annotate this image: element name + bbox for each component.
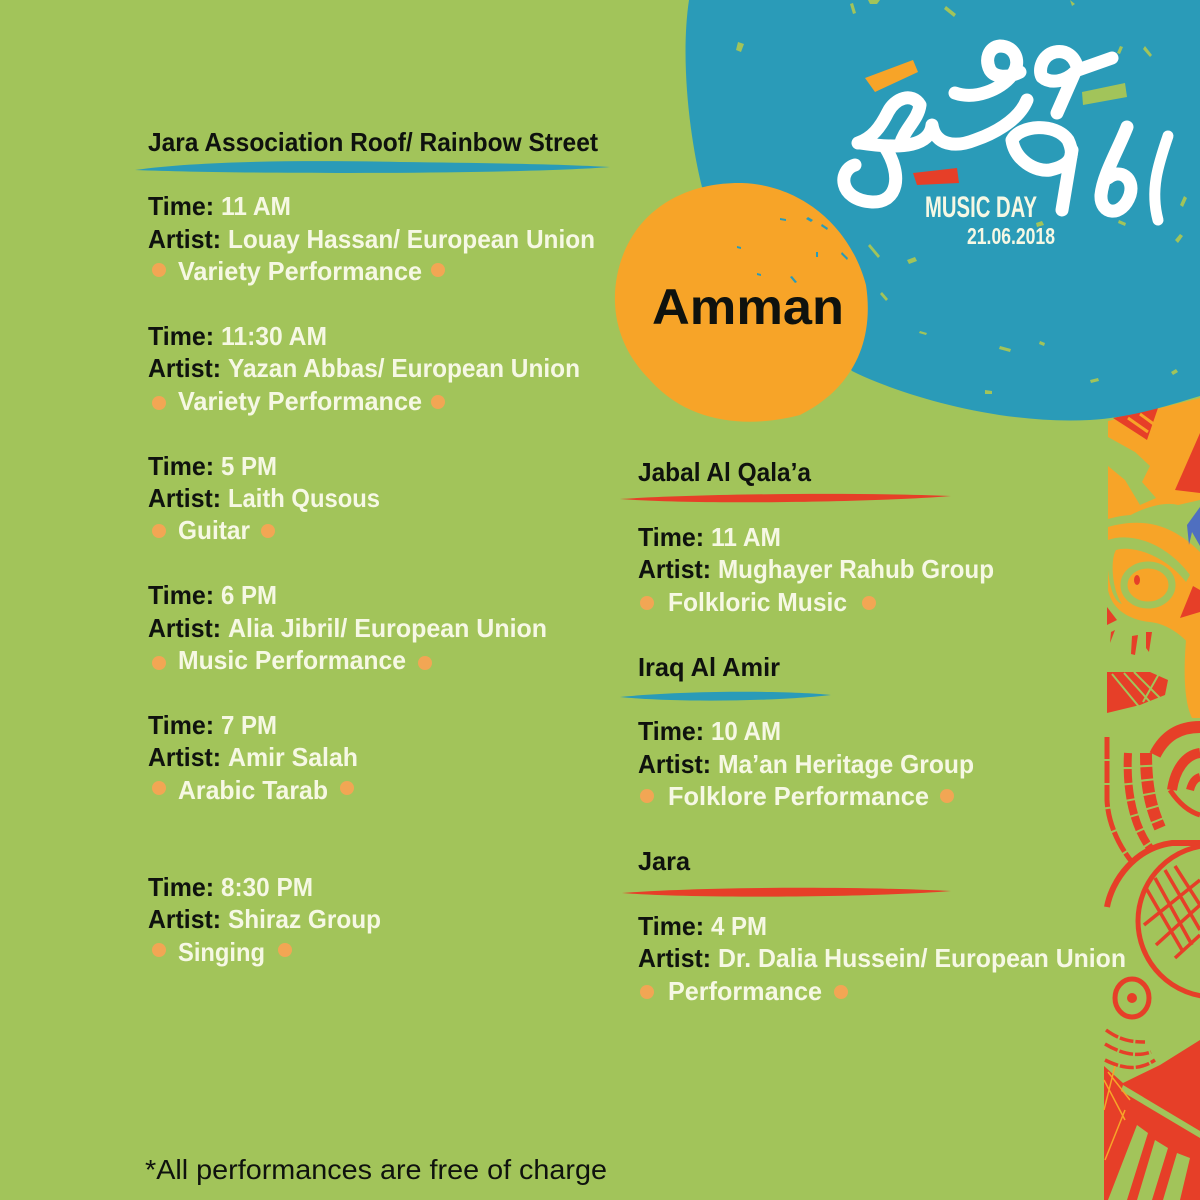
performance 4: Time: xyxy=(148,580,214,610)
performance 5: Amir Salah xyxy=(228,742,358,772)
performance 6: Singing xyxy=(178,937,265,967)
performance 2: Artist: xyxy=(148,353,221,383)
green stroke xyxy=(1082,83,1127,105)
orange stroke xyxy=(865,60,918,92)
performance 3: Laith Qusous xyxy=(228,483,380,513)
performance: Folkloric Music xyxy=(668,587,847,617)
venue heading: Jara xyxy=(638,846,691,876)
performance 3: Time: xyxy=(148,451,214,481)
music day label: MUSIC DAY xyxy=(925,191,1037,224)
performance xyxy=(638,522,994,617)
performance: Performance xyxy=(668,976,822,1006)
performance 3 xyxy=(148,451,380,545)
performance 3: Guitar xyxy=(178,515,250,545)
performance 1: Variety Performance xyxy=(178,256,422,286)
performance: 10 AM xyxy=(711,716,781,746)
performance 5: Artist: xyxy=(148,742,221,772)
city name: Amman xyxy=(652,279,844,335)
performance: Time: xyxy=(638,716,704,746)
red stroke xyxy=(913,168,959,185)
performance: Ma’an Heritage Group xyxy=(718,749,974,779)
performance 4 xyxy=(148,580,547,675)
performance 2 xyxy=(148,321,580,416)
performance 5: Time: xyxy=(148,710,214,740)
performance 3: Artist: xyxy=(148,483,221,513)
performance: 4 PM xyxy=(711,911,767,941)
orange Amman circle xyxy=(615,183,868,422)
performance: Folklore Performance xyxy=(668,781,929,811)
performance 5: Arabic Tarab xyxy=(178,775,328,805)
venue heading: Jara Association Roof/ Rainbow Street xyxy=(148,127,598,157)
performance 6: 8:30 PM xyxy=(221,872,313,902)
performance: Time: xyxy=(638,911,704,941)
performance 2: Yazan Abbas/ European Union xyxy=(228,353,580,383)
venue heading: Jabal Al Qala’a xyxy=(638,457,811,487)
date: 21.06.2018 xyxy=(967,223,1055,249)
performance 1: Time: xyxy=(148,191,214,221)
performance 4: Music Performance xyxy=(178,645,406,675)
blue blob background xyxy=(686,0,1200,421)
performance: Dr. Dalia Hussein/ European Union xyxy=(718,943,1126,973)
performance: Artist: xyxy=(638,749,711,779)
red underline xyxy=(622,888,951,897)
venue: Jara xyxy=(622,846,1126,1006)
logo: Arabic calligraphy mark with colour strokes xyxy=(844,46,1168,249)
right side decorative pattern xyxy=(1104,398,1200,1200)
performance 4: Artist: xyxy=(148,613,221,643)
blue underline xyxy=(135,161,610,173)
venue heading: Iraq Al Amir xyxy=(638,652,780,682)
performance xyxy=(638,911,1126,1006)
footnote: *All performances are free of charge xyxy=(145,1154,607,1185)
performance: Artist: xyxy=(638,943,711,973)
performance: Mughayer Rahub Group xyxy=(718,554,994,584)
performance 2: 11:30 AM xyxy=(221,321,327,351)
venue: Jara Association Roof xyxy=(135,127,610,967)
performance: Time: xyxy=(638,522,704,552)
confetti on blob xyxy=(736,0,1187,394)
performance 6: Artist: xyxy=(148,904,221,934)
performance 1: 11 AM xyxy=(221,191,291,221)
performance 6: Time: xyxy=(148,872,214,902)
venue: Jabal Al Qala'a xyxy=(620,457,994,617)
performance 2: Variety Performance xyxy=(178,386,422,416)
blue underline xyxy=(620,692,831,701)
red underline xyxy=(620,494,951,502)
performance 2: Time: xyxy=(148,321,214,351)
blue speckles xyxy=(737,217,848,283)
performance 4: Alia Jibril/ European Union xyxy=(228,613,547,643)
performance 1 xyxy=(148,191,595,286)
performance 3: 5 PM xyxy=(221,451,277,481)
performance xyxy=(638,716,974,811)
performance 1: Louay Hassan/ European Union xyxy=(228,224,595,254)
performance 4: 6 PM xyxy=(221,580,277,610)
performance 5: 7 PM xyxy=(221,710,277,740)
performance: Artist: xyxy=(638,554,711,584)
venue: Iraq Al Amir xyxy=(620,652,974,811)
performance 6 xyxy=(148,872,381,967)
performance 1: Artist: xyxy=(148,224,221,254)
performance 5 xyxy=(148,710,358,805)
performance: 11 AM xyxy=(711,522,781,552)
performance 6: Shiraz Group xyxy=(228,904,381,934)
